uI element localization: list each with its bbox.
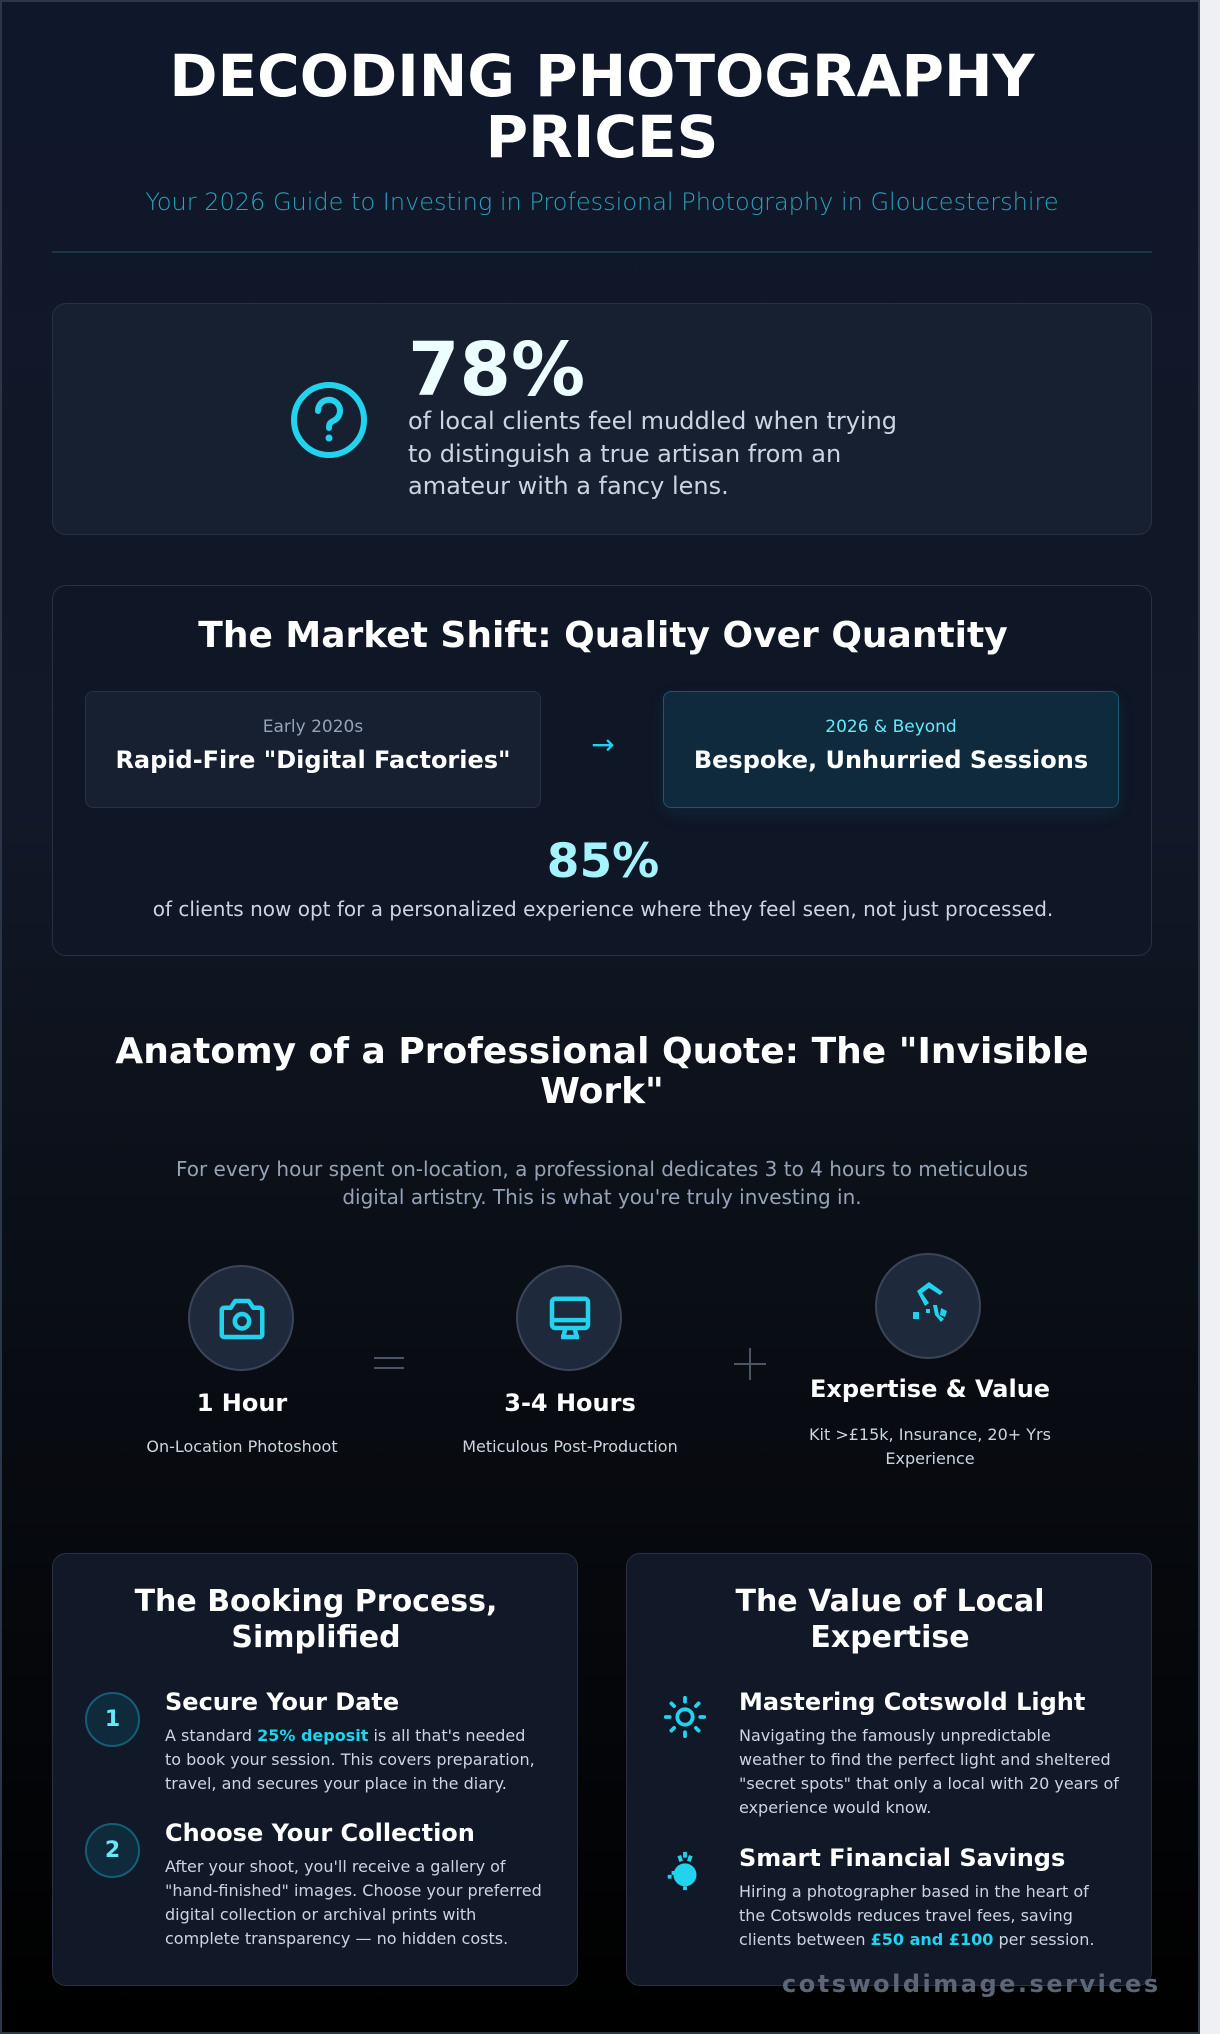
icon: expertise	[875, 1253, 981, 1359]
box: 2026 & beyond	[663, 691, 1119, 808]
item: cotswold light: Mastering Cotswold Light	[739, 1688, 1085, 1716]
watermark: cotswoldimage.services	[782, 1970, 1161, 1998]
title	[169, 42, 1035, 171]
heading	[735, 1584, 1044, 1655]
title: DECODING PHOTOGRAPHY	[169, 42, 1035, 110]
stat caption: of clients now opt for a personalized experience where they feel seen, not just processed.	[153, 897, 1053, 921]
icon: monitor	[516, 1265, 622, 1371]
item: 1 hour: 1 Hour	[197, 1389, 287, 1417]
heading	[134, 1584, 497, 1655]
arrow: →	[591, 728, 615, 761]
heading: The Value of Local	[735, 1584, 1044, 1619]
icon: camera	[188, 1265, 294, 1371]
heading: anatomy: Anatomy of a Professional Quote: The "Invisible Work"	[115, 1031, 1089, 1112]
panel: booking process	[52, 1553, 578, 1986]
icon: savings	[668, 1852, 696, 1890]
stat number: 78%	[408, 327, 585, 413]
panel: market shift	[52, 585, 1152, 956]
box: 2026 & beyond: Bespoke, Unhurried Sessions	[694, 746, 1088, 774]
icon: sun	[664, 1696, 706, 1738]
item: financial savings: Smart Financial Savings	[739, 1844, 1065, 1872]
item: cotswold light	[664, 1688, 1120, 1817]
item: financial savings: Hiring a photographer based in the heart of the Cotswolds reduces travel fees, saving clients between £50 and £100 per session.	[739, 1882, 1094, 1949]
item: 3-4 hours: 3-4 Hours	[504, 1389, 636, 1417]
box: early 2020s	[85, 691, 541, 808]
icon: question mark	[291, 382, 367, 458]
heading: Simplified	[231, 1620, 401, 1655]
box: 2026 & beyond: 2026 & Beyond	[825, 717, 957, 737]
item: expertise & value	[809, 1253, 1051, 1468]
item: 1 hour: On-Location Photoshoot	[146, 1437, 338, 1456]
item: financial savings	[668, 1844, 1094, 1949]
heading: Expertise	[810, 1620, 970, 1655]
panel: 78% stat	[52, 303, 1152, 535]
panel: local expertise	[626, 1553, 1152, 1986]
badge 2: 2	[105, 1838, 120, 1863]
step 2: Choose Your Collection	[165, 1819, 475, 1847]
step 1: A standard 25% deposit is all that's needed to book your session. This covers preparation, travel, and secures your place in the diary.	[165, 1726, 535, 1793]
step 2: After your shoot, you'll receive a gallery of "hand-finished" images. Choose your preferred digital collection or archival prints with complete transparency — no hidden costs.	[165, 1857, 542, 1948]
box: early 2020s: Early 2020s	[263, 717, 363, 737]
stat text: of local clients feel muddled when trying to distinguish a true artisan from an amateur with a fancy lens.	[408, 407, 897, 500]
item: expertise & value: Expertise & Value	[810, 1375, 1050, 1403]
item: 3-4 hours: Meticulous Post-Production	[462, 1437, 678, 1456]
box: early 2020s: Rapid-Fire "Digital Factories"	[115, 746, 511, 774]
badge 1: 1	[105, 1707, 120, 1732]
step 2	[85, 1819, 542, 1948]
heading: The Booking Process,	[135, 1584, 497, 1619]
stat 85%: 85%	[547, 834, 659, 889]
item: 3-4 hours	[462, 1265, 678, 1456]
step 1	[85, 1688, 535, 1793]
item: cotswold light: Navigating the famously unpredictable weather to find the perfect light and sheltered "secret spots" that only a local with 20 years of experience would know.	[739, 1726, 1119, 1817]
badge 1	[85, 1692, 140, 1747]
title: PRICES	[486, 103, 718, 171]
heading: The Market Shift: Quality Over Quantity	[198, 615, 1008, 656]
item: expertise & value: Kit >£15k, Insurance, 20+ Yrs Experience	[809, 1425, 1051, 1468]
step 1: Secure Your Date	[165, 1688, 399, 1716]
equals sign	[374, 1357, 404, 1369]
intro text: For every hour spent on-location, a professional dedicates 3 to 4 hours to meticulous digital artistry. This is what you're truly investing in.	[176, 1157, 1028, 1209]
item: 1 hour	[146, 1265, 338, 1456]
subtitle: Your 2026 Guide to Investing in Professional Photography in Gloucestershire	[145, 188, 1059, 216]
badge 2	[85, 1823, 140, 1878]
plus sign	[734, 1348, 766, 1380]
